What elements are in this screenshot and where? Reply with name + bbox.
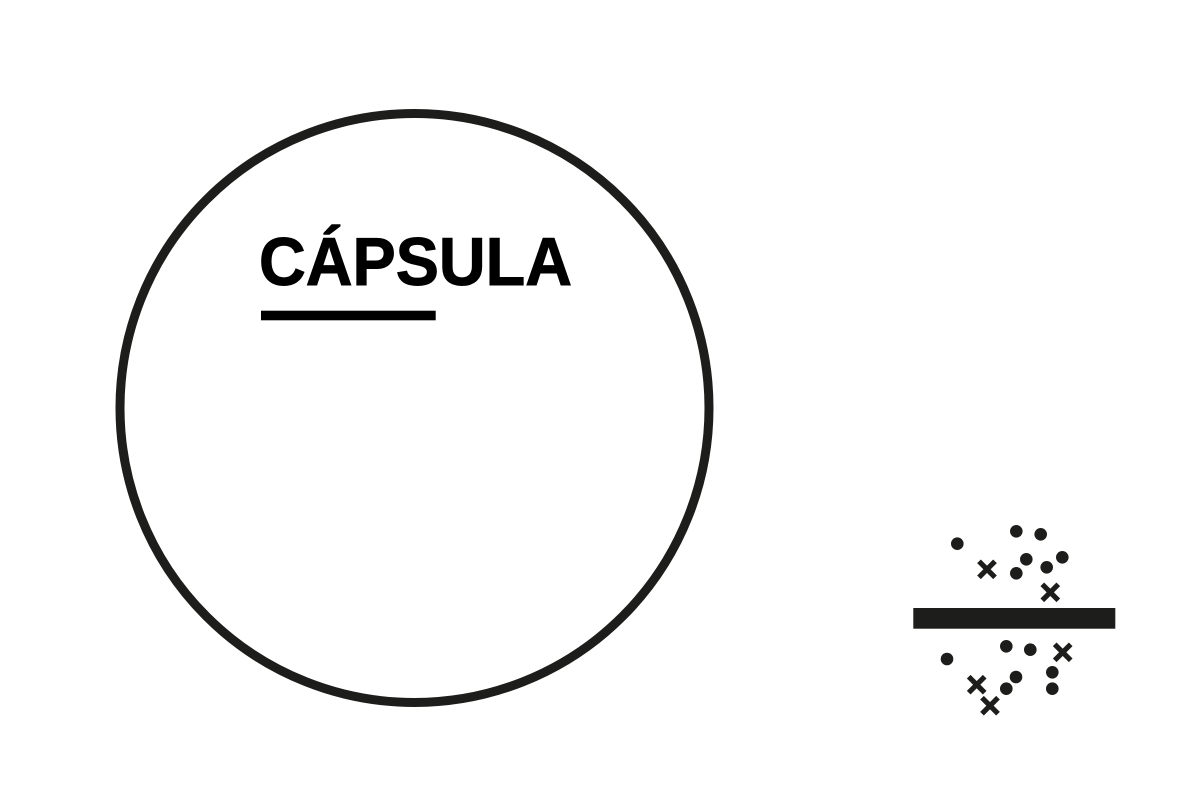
crosses below the membrane: [969, 644, 1071, 714]
capsule circle: [120, 114, 709, 702]
crosses above the membrane: [979, 561, 1058, 600]
title underline: [261, 311, 436, 320]
particles below the membrane: [941, 640, 1059, 695]
title: CÁPSULA: [259, 224, 572, 300]
membrane bar: [913, 608, 1115, 629]
membrane diagram: [913, 525, 1115, 714]
particles above the membrane: [951, 525, 1069, 580]
